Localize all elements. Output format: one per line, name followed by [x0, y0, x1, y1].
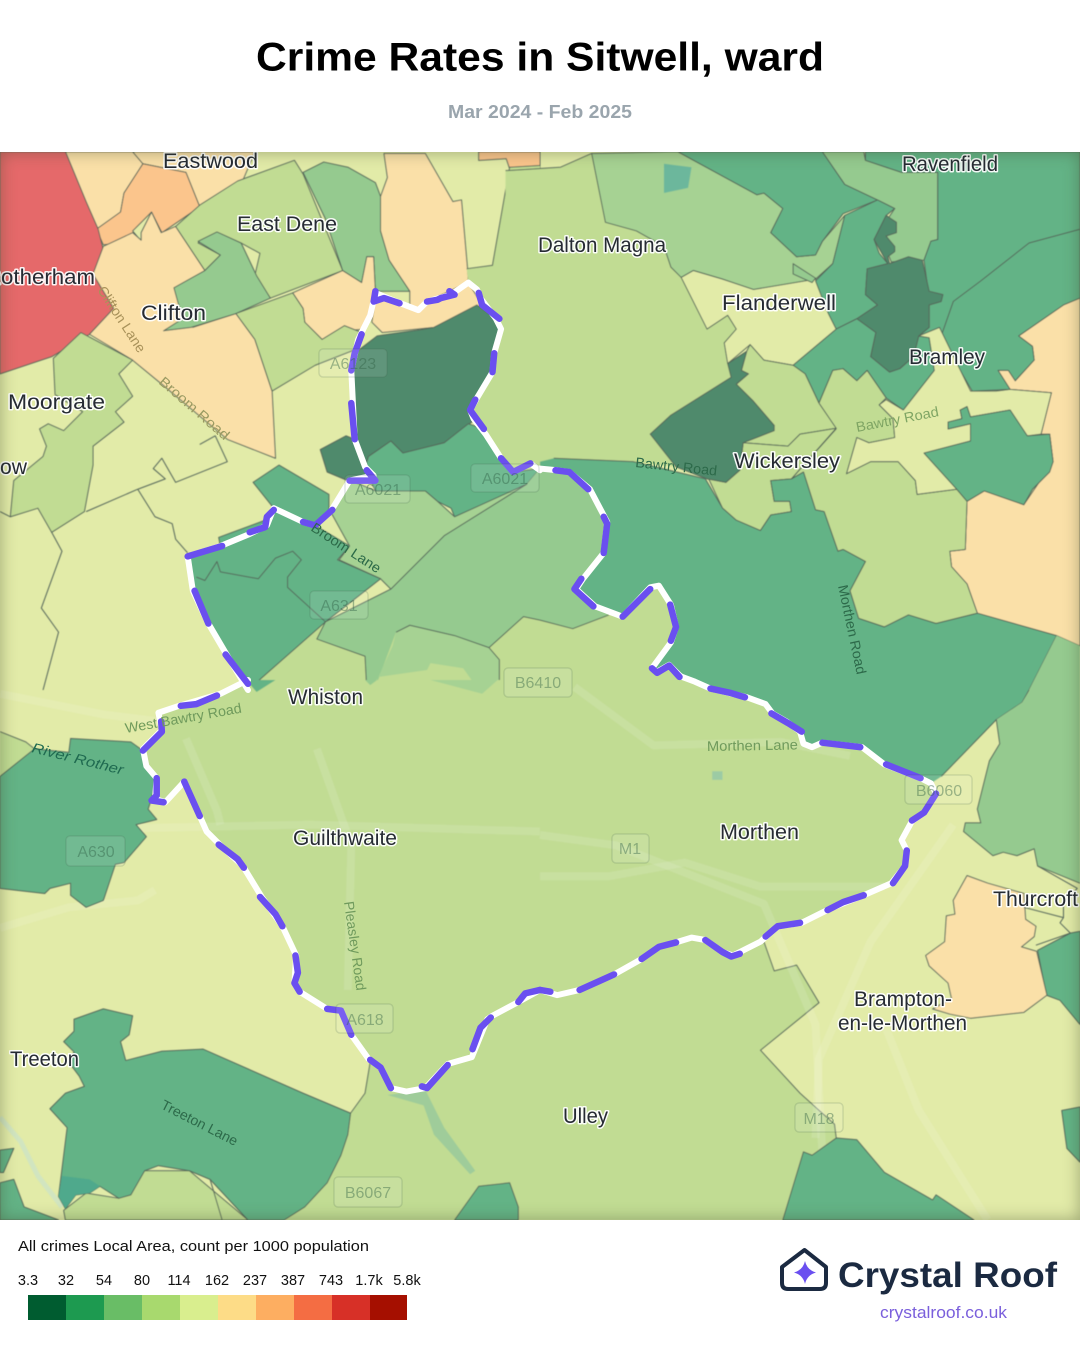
shield: A6123 [319, 349, 387, 377]
shield: A631 [310, 591, 368, 619]
legend scale values: 54 [96, 1273, 112, 1289]
shield: A6021 west [345, 475, 410, 503]
road label: Morthen Road: Morthen Road [835, 583, 870, 676]
road label: Bawtry Road east: Bawtry Road [855, 403, 940, 435]
shield: B6067: B6067 [345, 1185, 391, 1202]
road label: Broom Lane: Broom Lane [308, 519, 384, 576]
legend [18, 1239, 421, 1320]
road number shields [66, 349, 972, 1207]
road label: Pleasley Road: Pleasley Road [341, 900, 369, 992]
legend title: All crimes Local Area, count per 1000 population [18, 1239, 369, 1255]
place: Thurcroft: Thurcroft [993, 888, 1078, 911]
shield: B6410 [504, 668, 572, 697]
legend scale values: 162 [205, 1273, 229, 1289]
legend colour bar [28, 1295, 407, 1320]
shield: A630 [66, 836, 125, 866]
wordmark: Crystal Roof [838, 1256, 1057, 1295]
place names [0, 150, 1078, 1128]
road and river names [30, 283, 940, 1149]
south-east quadrant areas [540, 677, 1080, 1220]
shield: A6123: A6123 [330, 356, 376, 373]
legend scale values: 387 [281, 1273, 305, 1289]
shield: M18 [795, 1103, 843, 1132]
title: Crime Rates in Sitwell, ward [256, 36, 824, 80]
place: Flanderwell: Flanderwell [722, 292, 836, 315]
south-west quadrant areas [0, 680, 540, 1220]
shield: B6060 [905, 775, 972, 804]
subtitle: date range: Mar 2024 - Feb 2025 [448, 102, 632, 122]
legend scale values: 114 [167, 1273, 191, 1289]
river label: River Rother: River Rother [30, 739, 127, 778]
north-west quadrant areas [0, 152, 540, 690]
place: Eastwood: Eastwood [163, 150, 258, 173]
shield: B6410: B6410 [515, 675, 561, 692]
road label: Morthen Lane: Morthen Lane [707, 736, 798, 754]
place: Ulley: Ulley [563, 1105, 608, 1128]
shield: M1: M1 [619, 841, 641, 858]
shield: A618: A618 [346, 1012, 384, 1029]
shield: B6067 [334, 1177, 402, 1207]
place: Clifton: Clifton [141, 302, 206, 325]
place: Wickersley: Wickersley [734, 450, 841, 473]
shield: A630: A630 [77, 844, 115, 861]
shield: M18: M18 [803, 1111, 835, 1128]
boundary base line [143, 283, 936, 1092]
legend scale values [18, 1273, 421, 1289]
legend scale values: 5.8k [393, 1273, 421, 1289]
place: Brampton-en-le-Morthen: Brampton- [854, 988, 952, 1011]
place: Treeton: Treeton [10, 1048, 79, 1071]
logo: Crystal Roof [782, 1250, 1057, 1322]
place: Guilthwaite: Guilthwaite [293, 827, 397, 850]
boundary purple dashes [143, 291, 936, 1088]
map areas: crime-rate neighbourhood polygons [0, 152, 1080, 1220]
shield: A6021 east: A6021 [482, 471, 528, 488]
place: Morthen: Morthen [720, 821, 799, 844]
legend scale values: 743 [319, 1273, 343, 1289]
shield: M1 [612, 834, 649, 863]
road label: Broom Road: Broom Road [156, 373, 233, 443]
north-east quadrant areas [506, 152, 1080, 783]
shield: A618 [336, 1004, 393, 1033]
legend scale values: 32 [58, 1273, 74, 1289]
shield: A6021 west: A6021 [355, 482, 401, 499]
panel: choropleth map [0, 150, 1080, 1220]
place: partial name at left edge: ow [0, 456, 28, 479]
legend scale values: 1.7k [355, 1273, 383, 1289]
place: Dalton Magna: Dalton Magna [538, 234, 666, 257]
road label: Bawtry Road central: Bawtry Road [635, 454, 718, 479]
place: East Dene: East Dene [237, 213, 337, 236]
legend scale values: 3.3 [18, 1273, 38, 1289]
road label: Treeton Lane: Treeton Lane [159, 1096, 241, 1149]
shield: B6060: B6060 [916, 783, 962, 800]
legend scale values: 237 [243, 1273, 267, 1289]
place: Moorgate: Moorgate [8, 391, 105, 414]
website url: crystalroof.co.uk [880, 1304, 1008, 1322]
place: Whiston: Whiston [288, 686, 363, 709]
road label: Clifton Lane: Clifton Lane [94, 283, 149, 356]
place: Brampton-en-le-Morthen [838, 988, 967, 1035]
legend scale values: 80 [134, 1273, 150, 1289]
ward boundary: white line with purple dashes [143, 283, 936, 1092]
place: Bramley: Bramley [909, 346, 985, 369]
shield: A6021 east [471, 464, 539, 492]
place: Ravenfield: Ravenfield [902, 153, 998, 176]
shield: A631: A631 [320, 598, 358, 615]
road label: West Bawtry Road: West Bawtry Road [124, 700, 243, 736]
icon: house outline with star [782, 1250, 826, 1289]
place: Brampton-en-le-Morthen: en-le-Morthen [838, 1012, 967, 1035]
